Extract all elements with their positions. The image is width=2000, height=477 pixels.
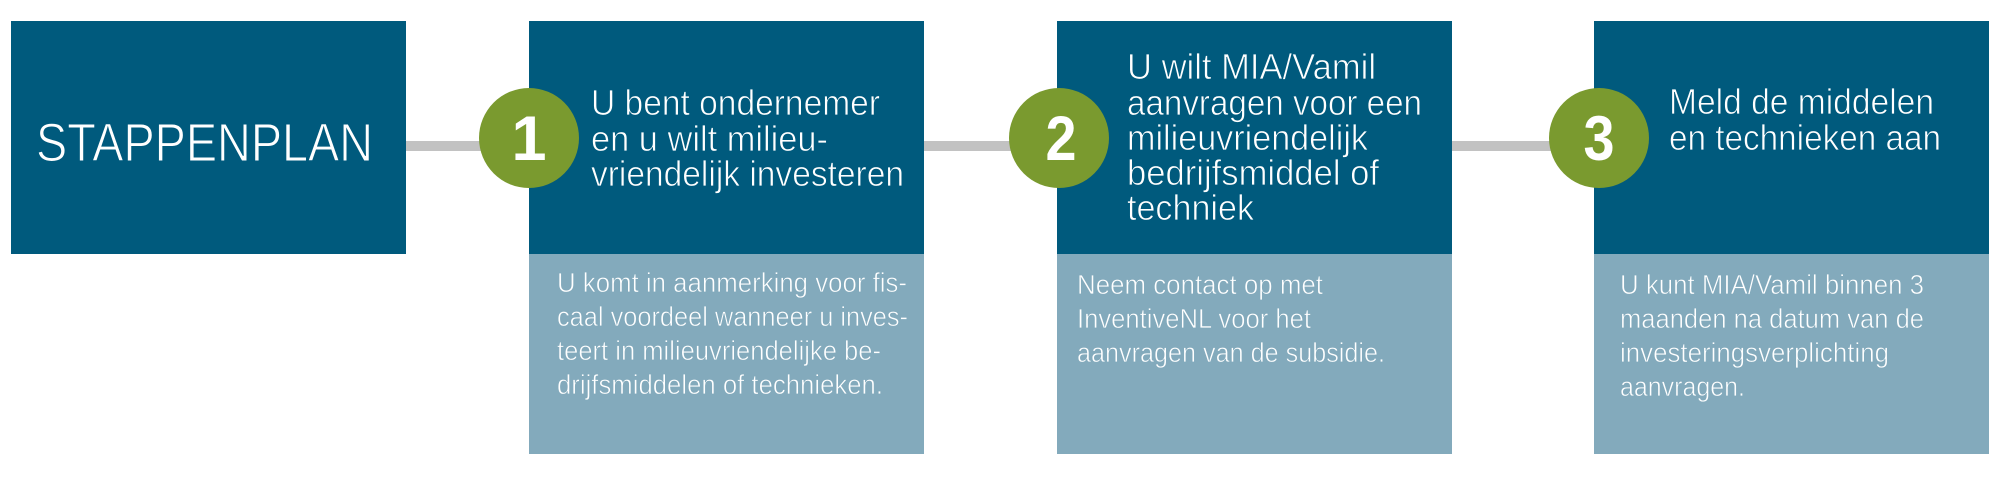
step 1 heading: U bent ondernemer [591, 82, 880, 123]
step 3 body text: investeringsverplichting [1620, 337, 1889, 368]
icon: number badge 1 [479, 88, 579, 188]
step 2 heading: milieuvriendelijk [1127, 117, 1369, 158]
step 2 header box [1057, 21, 1452, 254]
step 3 body text: aanvragen. [1620, 371, 1745, 402]
step 2 body text: InventiveNL voor het [1077, 303, 1311, 334]
step 2 heading: U wilt MIA/Vamil [1127, 46, 1376, 87]
step 1 body text: caal voordeel wanneer u inves- [557, 301, 908, 332]
step 1 heading: en u wilt milieu- [591, 118, 828, 159]
panel: step 3 [1549, 21, 1989, 454]
step 3 heading [1669, 81, 1941, 158]
panel: step 1 [479, 21, 924, 454]
step 3 body text: maanden na datum van de [1620, 303, 1924, 334]
step 1 body text: U komt in aanmerking voor fis- [557, 267, 907, 298]
step 3 body box [1594, 254, 1989, 454]
step 3 heading: Meld de middelen [1669, 81, 1934, 122]
step 2 heading: aanvragen voor een [1127, 82, 1422, 123]
panel: title STAPPENPLAN [11, 21, 406, 254]
heading: STAPPENPLAN: STAPPENPLAN [36, 113, 373, 173]
connector bar [406, 141, 1594, 151]
icon: number badge 1: 1 [511, 104, 547, 174]
step 1 body text [557, 267, 908, 400]
icon: number badge 3 [1549, 88, 1649, 188]
step 3 body text [1620, 269, 1924, 402]
step 3 body text: U kunt MIA/Vamil binnen 3 [1620, 269, 1924, 300]
step 1 heading [591, 82, 904, 194]
step 2 heading: techniek [1127, 187, 1255, 228]
icon: number badge 3: 3 [1584, 104, 1614, 174]
step 1 body box [529, 254, 924, 454]
step 1 body text: drijfsmiddelen of technieken. [557, 369, 883, 400]
icon: number badge 2 [1009, 88, 1109, 188]
step 2 body box [1057, 254, 1452, 454]
step 2 body text: Neem contact op met [1077, 269, 1323, 300]
step 1 body text: teert in milieuvriendelijke be- [557, 335, 881, 366]
step 3 header box [1594, 21, 1989, 254]
step 1 heading: vriendelijk investeren [591, 153, 904, 194]
step 3 heading: en technieken aan [1669, 117, 1941, 158]
step 2 body text: aanvragen van de subsidie. [1077, 337, 1385, 368]
step 1 header box [529, 21, 924, 254]
icon: number badge 2: 2 [1046, 104, 1076, 174]
step 2 heading [1127, 46, 1422, 228]
step 2 body text [1077, 269, 1385, 368]
step 2 heading: bedrijfsmiddel of [1127, 152, 1380, 193]
panel: step 2 [1009, 21, 1452, 454]
